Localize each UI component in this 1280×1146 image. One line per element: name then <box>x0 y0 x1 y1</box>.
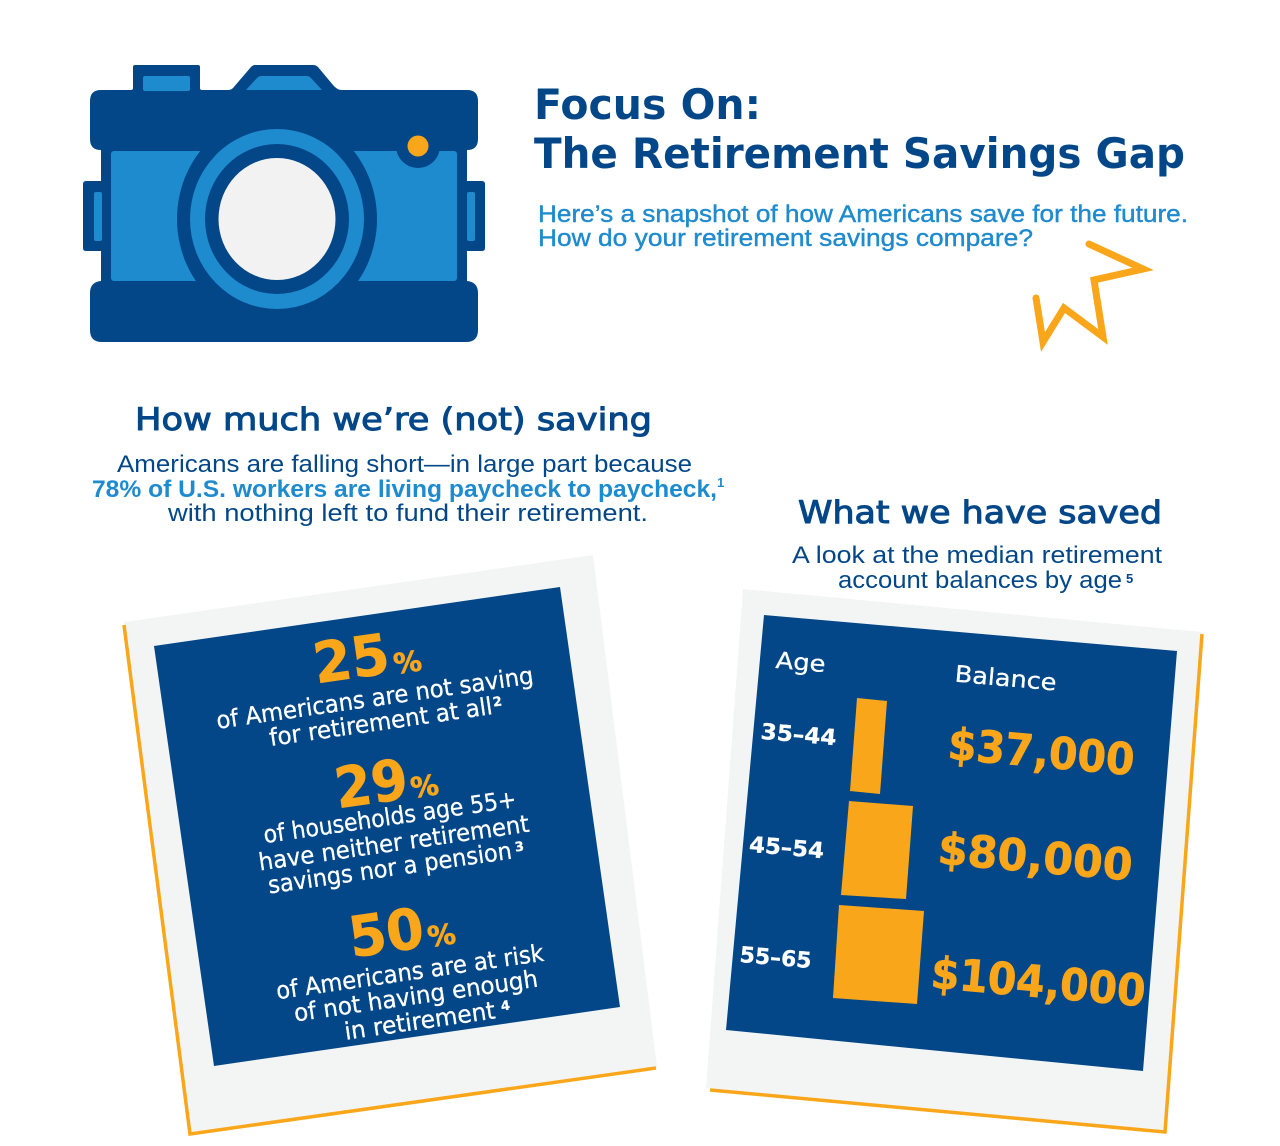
title: Focus On: <box>534 80 761 129</box>
stat: 29 percent: savings nor a pension <box>266 837 514 899</box>
row: age 55-65: $104,000 <box>929 948 1148 1017</box>
stat: 25 percent: % <box>391 644 424 681</box>
panel: balances by age polaroid <box>706 589 1202 1132</box>
text block: median balances intro <box>792 542 1162 594</box>
stat: 29 percent: % <box>408 768 441 805</box>
stat: 50 percent: of not having enough <box>292 965 540 1027</box>
stat: 25 percent: 2 <box>492 694 503 711</box>
row: age 35-44: 35–44 <box>760 720 838 751</box>
row: age 55-65: 55–65 <box>739 943 813 974</box>
row: age 45-54 <box>748 801 1135 899</box>
intro text: How do your retirement savings compare? <box>538 225 1033 252</box>
stat: 50 percent: in retirement <box>343 996 497 1046</box>
stat: 29 percent <box>257 747 531 899</box>
stat: 25 percent: for retirement at all <box>268 692 494 752</box>
panel: savings statistics polaroid <box>124 555 657 1135</box>
text block: saving intro: with nothing left to fund their retirement. <box>167 500 648 527</box>
stat: 29 percent: 3 <box>514 839 525 856</box>
stat: 50 percent <box>274 896 546 1046</box>
heading: what we have saved: What we have saved <box>798 495 1162 531</box>
text block: saving intro <box>92 451 724 527</box>
text block: median balances intro: account balances by age <box>838 567 1122 594</box>
row: age 55-65 <box>739 905 1148 1017</box>
intro text <box>538 201 1188 252</box>
stat: 25 percent: 25 <box>309 622 394 697</box>
stat: 50 percent: % <box>425 917 458 954</box>
stat: 25 percent <box>214 622 535 752</box>
row: age 35-44 <box>760 698 1137 794</box>
stat: 50 percent: 50 <box>345 896 428 971</box>
title: The Retirement Savings Gap <box>534 129 1185 178</box>
intro text: Here’s a snapshot of how Americans save for the future. <box>538 201 1188 228</box>
stat: 29 percent: of households age 55+ <box>262 785 518 849</box>
icon: camera <box>83 65 485 342</box>
column headers: Balance <box>954 662 1058 696</box>
column headers <box>775 648 1058 696</box>
title <box>534 80 1185 178</box>
text block: saving intro: 78% of U.S. workers are living paycheck to paycheck, <box>92 476 717 503</box>
row: age 45-54: 45–54 <box>748 833 825 864</box>
row: age 45-54: $80,000 <box>936 824 1135 891</box>
stat: 50 percent: of Americans are at risk <box>274 939 546 1005</box>
stat: 50 percent: 4 <box>500 998 511 1015</box>
text block: saving intro: 1 <box>717 475 724 490</box>
text block: median balances intro: 5 <box>1126 571 1133 586</box>
stat: 25 percent: of Americans are not saving <box>214 661 535 735</box>
heading: how much we're not saving: How much we’re (not) saving <box>135 402 652 438</box>
text block: median balances intro: A look at the median retirement <box>792 542 1162 569</box>
stat: 29 percent: 29 <box>331 747 412 822</box>
column headers: Age <box>775 648 827 678</box>
text block: saving intro: Americans are falling short—in large part because <box>117 451 692 478</box>
icon: orange spark arrow <box>1036 244 1143 342</box>
row: age 35-44: $37,000 <box>946 719 1137 786</box>
stat: 29 percent: have neither retirement <box>257 810 531 876</box>
